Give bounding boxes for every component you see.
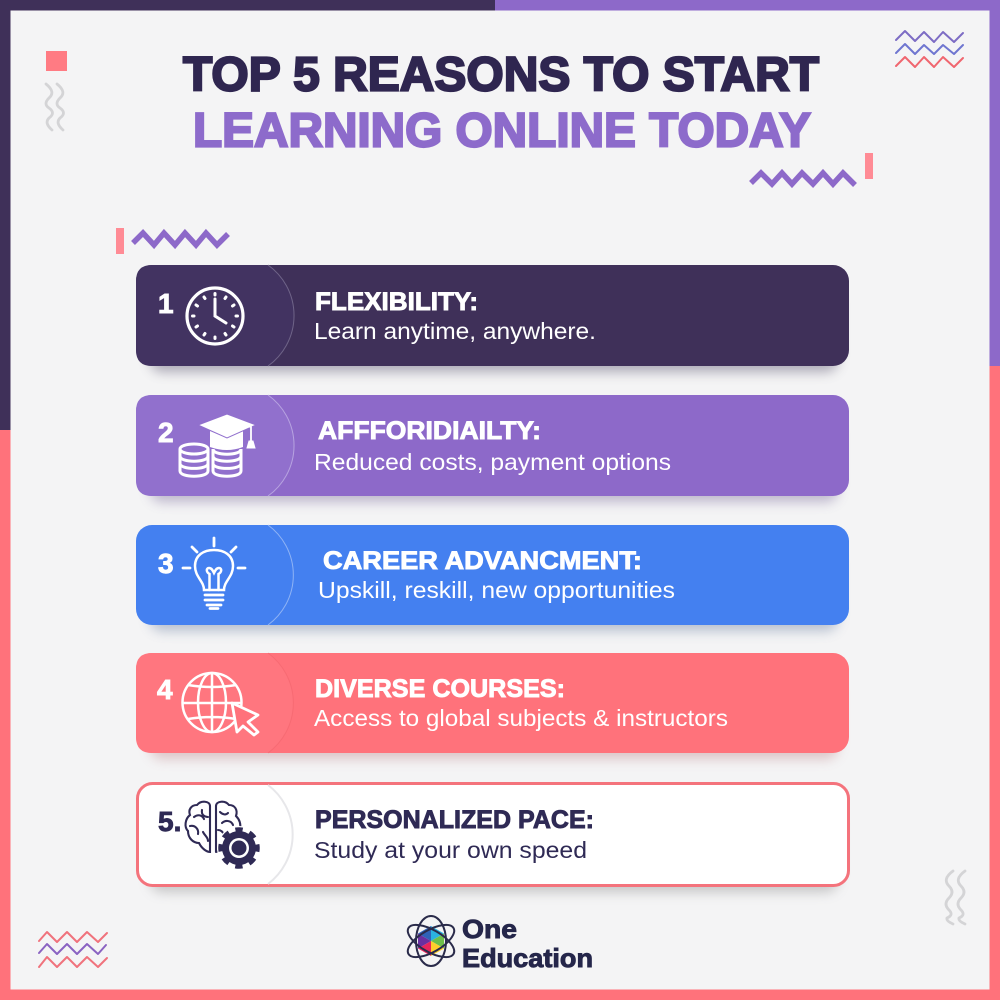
text 1 bbox=[314, 288, 596, 344]
text 5: Study at your own speed bbox=[314, 837, 587, 863]
logo: One Education: One bbox=[462, 914, 517, 944]
number 3: 3 bbox=[158, 548, 174, 579]
card 2: affordability bbox=[136, 395, 849, 502]
logo mark bbox=[403, 916, 459, 966]
title: TOP 5 REASONS TO START bbox=[183, 48, 819, 102]
card 5: personalized pace bbox=[138, 784, 848, 892]
text 1: Learn anytime, anywhere. bbox=[314, 318, 596, 344]
number 5: 5. bbox=[158, 806, 181, 837]
text 2: Reduced costs, payment options bbox=[314, 449, 671, 475]
text 5 bbox=[314, 806, 594, 863]
card 3: career advancement bbox=[136, 525, 849, 631]
number 2: 2 bbox=[158, 417, 174, 448]
icon: graduation cap and coins bbox=[180, 414, 256, 476]
text 4: DIVERSE COURSES: bbox=[315, 675, 565, 703]
text 4: Access to global subjects & instructors bbox=[314, 705, 728, 731]
logo: One Education: Education bbox=[462, 943, 593, 973]
text 3: Upskill, reskill, new opportunities bbox=[318, 577, 675, 603]
text 3 bbox=[318, 547, 675, 603]
logo: One Education bbox=[403, 914, 593, 973]
title: LEARNING ONLINE TODAY bbox=[193, 104, 811, 158]
icon: clock bbox=[187, 288, 243, 344]
number 1: 1 bbox=[158, 288, 174, 319]
text 1: FLEXIBILITY: bbox=[315, 288, 478, 316]
text 4 bbox=[314, 675, 728, 731]
icon: brain and gear bbox=[186, 802, 261, 870]
text 5: PERSONALIZED PACE: bbox=[315, 806, 594, 834]
icon: globe with cursor bbox=[182, 673, 258, 735]
icon: light bulb bbox=[183, 538, 245, 608]
card 4: diverse courses bbox=[136, 653, 849, 759]
number 4: 4 bbox=[157, 674, 173, 705]
text 2 bbox=[314, 417, 671, 475]
title bbox=[183, 48, 819, 158]
text 2: AFFFORIDIAILTY: bbox=[318, 417, 541, 445]
card 1: flexibility bbox=[136, 265, 849, 372]
text 3: CAREER ADVANCMENT: bbox=[323, 547, 642, 575]
